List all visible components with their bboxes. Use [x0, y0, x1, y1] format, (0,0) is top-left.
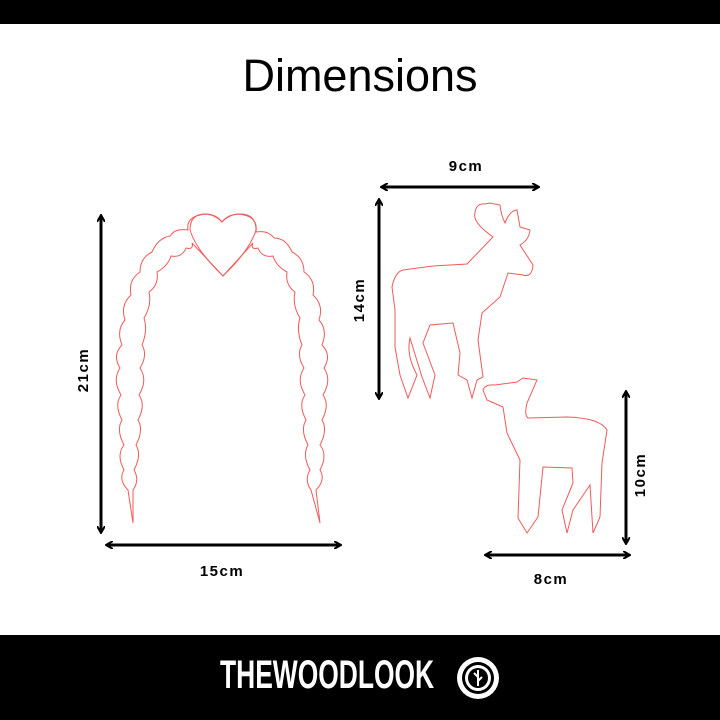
arch shape	[116, 214, 328, 523]
arrows	[101, 187, 629, 555]
fawn shape	[483, 378, 607, 533]
brand name: THEWOODLOOK	[220, 653, 434, 697]
stag shape	[392, 203, 533, 398]
logo icon	[457, 657, 499, 699]
labels: 9cm	[449, 158, 483, 175]
title: Dimensions	[242, 50, 478, 101]
labels: 15cm	[200, 563, 244, 580]
labels: 10cm	[632, 453, 649, 497]
footer bar	[0, 635, 720, 720]
labels: 8cm	[534, 571, 568, 588]
top bar	[0, 0, 720, 24]
labels: 21cm	[75, 348, 92, 392]
labels: 14cm	[351, 278, 368, 322]
labels	[75, 158, 649, 588]
